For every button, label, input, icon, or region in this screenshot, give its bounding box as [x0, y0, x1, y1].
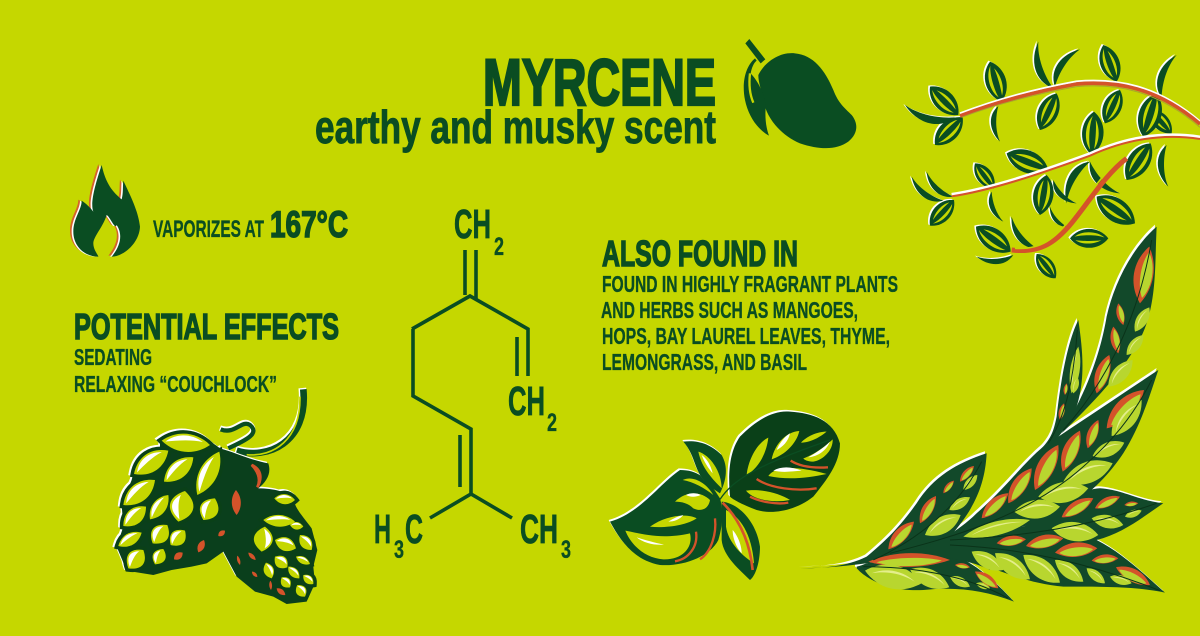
text: effects list	[74, 344, 277, 397]
basil right leaf	[728, 410, 840, 512]
text: also found in body: LEMONGRASS, AND BASIL	[602, 349, 807, 375]
hop stem	[220, 388, 304, 455]
text: also found in body: FOUND IN HIGHLY FRAGRANT PLANTS	[602, 271, 898, 297]
label: H3C	[374, 506, 423, 564]
label: H3C: H	[374, 506, 391, 552]
hop scales	[115, 432, 316, 600]
hop body	[115, 432, 317, 604]
illustration: basil leaves	[609, 410, 840, 580]
laurel veins	[863, 240, 1160, 598]
laurel cells	[862, 245, 1158, 595]
basil left leaf	[609, 468, 722, 565]
illustration: hop cone	[114, 388, 317, 604]
label: top CH2	[454, 201, 504, 261]
bonds	[412, 250, 528, 518]
label: right CH2: CH	[508, 378, 545, 424]
basil bottom leaf	[720, 440, 830, 580]
hop orange accents	[172, 490, 287, 597]
laurel leaf silhouettes	[798, 225, 1165, 602]
text: also found in body: AND HERBS SUCH AS MANGOES,	[601, 297, 858, 323]
subtitle: earthy and musky scent: earthy and musky scent	[315, 101, 716, 153]
label: CH3: CH	[520, 506, 558, 552]
text: vaporizes at: VAPORIZES AT	[153, 216, 264, 243]
heading: potential effects: POTENTIAL EFFECTS	[74, 306, 339, 347]
icon: flame	[70, 164, 140, 257]
chart: myrcene molecule structure	[374, 201, 571, 564]
label: CH3: 3	[561, 536, 571, 564]
label: right CH2: 2	[547, 409, 557, 437]
text: also found in body: HOPS, BAY LAUREL LEAVES, THYME,	[602, 323, 890, 349]
label: right CH2	[508, 378, 557, 437]
basil top small leaf	[682, 440, 726, 493]
label: H3C: 3	[394, 536, 404, 564]
illustration: thyme sprigs	[901, 41, 1200, 283]
illustration: bay laurel branch	[798, 225, 1165, 602]
thyme leaves	[901, 41, 1177, 283]
text: 167°C: 167°C	[270, 204, 348, 245]
label: top CH2: 2	[494, 233, 504, 261]
hop white edge	[114, 430, 316, 602]
text: effects list: RELAXING “COUCHLOCK”	[74, 371, 277, 397]
thyme stems	[952, 81, 1200, 251]
text: effects list: SEDATING	[74, 344, 152, 370]
icon: mango	[744, 39, 856, 148]
text: also found in body	[601, 271, 898, 375]
label: top CH2: CH	[454, 201, 491, 247]
heading: also found in: ALSO FOUND IN	[602, 233, 798, 274]
title: MYRCENE: MYRCENE	[483, 45, 716, 119]
label: H3C: C	[405, 506, 423, 552]
